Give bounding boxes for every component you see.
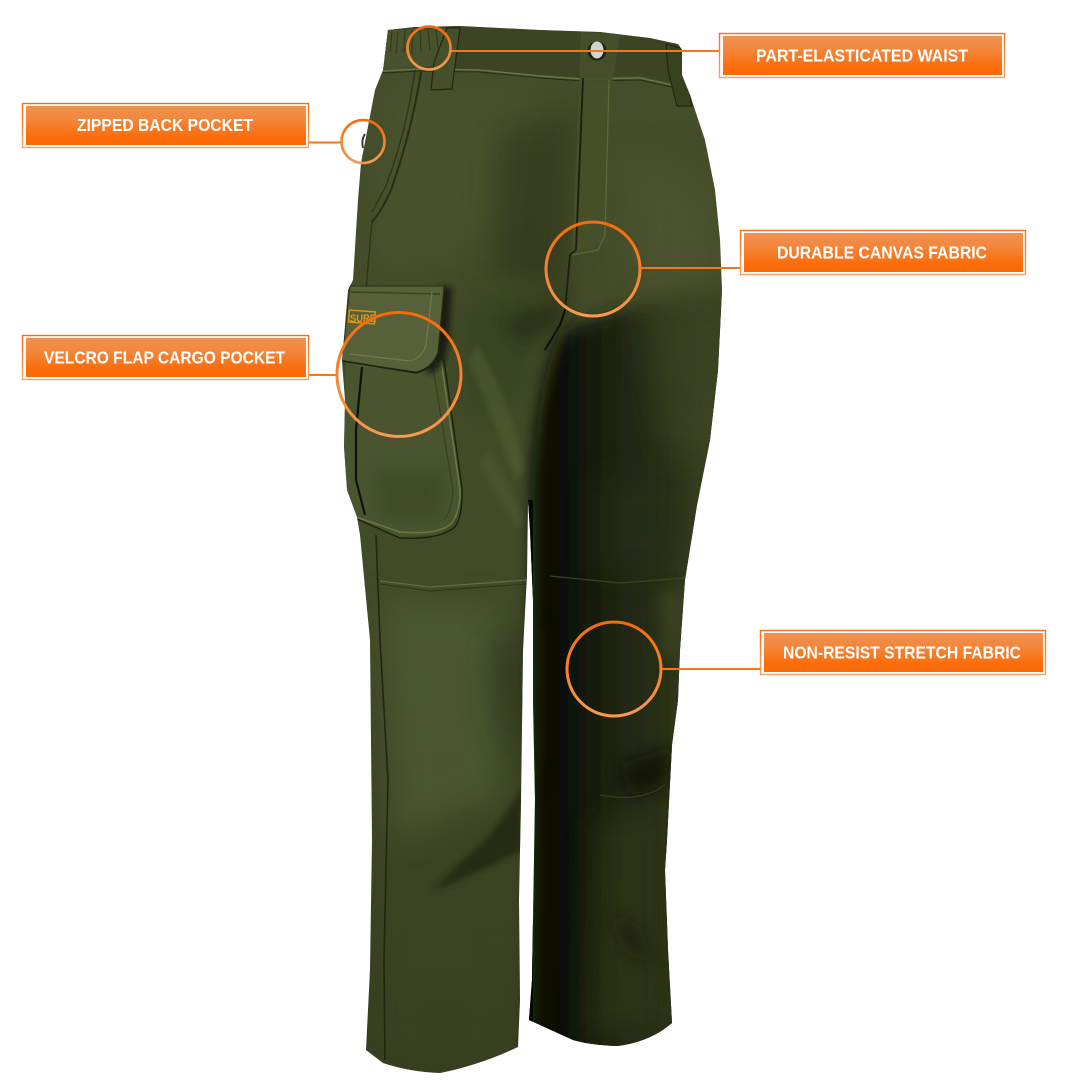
side seam: [366, 220, 372, 290]
thigh creases: [470, 350, 524, 474]
fly placket: [572, 32, 620, 255]
label frame: [22, 336, 308, 380]
left hip light: [370, 80, 555, 270]
cargo flap: [342, 286, 444, 372]
connector line: [309, 142, 341, 144]
highlight circle: [408, 26, 450, 70]
lower left leg shading: [390, 606, 503, 827]
label fill: [26, 338, 306, 377]
callout: non-resist stretch fabric: [567, 622, 1046, 716]
knee seams: [380, 580, 527, 587]
brand logo: SURE: [350, 313, 376, 325]
callout: velcro flap cargo pocket: [22, 312, 461, 436]
callout: part-elasticated waist: [408, 26, 1004, 78]
brand logo: [349, 310, 376, 325]
label frame: [760, 630, 1046, 674]
right thigh light: [666, 198, 722, 276]
pocket opening and hip panel: [372, 72, 421, 222]
label text: VELCRO FLAP CARGO POCKET: [44, 348, 285, 368]
connector line: [309, 374, 337, 376]
highlight circle: [567, 622, 661, 716]
callout: durable canvas fabric: [546, 222, 1026, 316]
label text: PART-ELASTICATED WAIST: [756, 46, 968, 66]
belt loops: [431, 28, 460, 90]
shade beside fly: [490, 110, 575, 300]
connector line: [641, 267, 741, 269]
label fill: [723, 36, 1002, 75]
callout: zipped back pocket: [22, 104, 384, 163]
label frame: [720, 34, 1004, 78]
label frame: [22, 104, 308, 148]
label text: ZIPPED BACK POCKET: [77, 115, 253, 135]
highlight circle: [337, 312, 461, 436]
connector line: [451, 50, 720, 52]
label text: DURABLE CANVAS FABRIC: [777, 242, 987, 262]
highlight circle: [342, 120, 384, 163]
label text: NON-RESIST STRETCH FABRIC: [783, 642, 1021, 662]
trousers product image: [342, 26, 740, 1073]
icon: zip pull: [362, 134, 365, 148]
label fill: [744, 233, 1023, 272]
label frame: [740, 230, 1026, 274]
label fill: [26, 106, 306, 145]
icon: waistband button: [588, 42, 606, 60]
cargo pocket: [344, 358, 461, 537]
right leg dark shading: [531, 290, 740, 1060]
highlight circle: [546, 222, 640, 316]
fold under crotch: [545, 310, 565, 350]
waistband: [384, 26, 682, 85]
label fill: [764, 633, 1043, 672]
connector line: [662, 668, 761, 670]
